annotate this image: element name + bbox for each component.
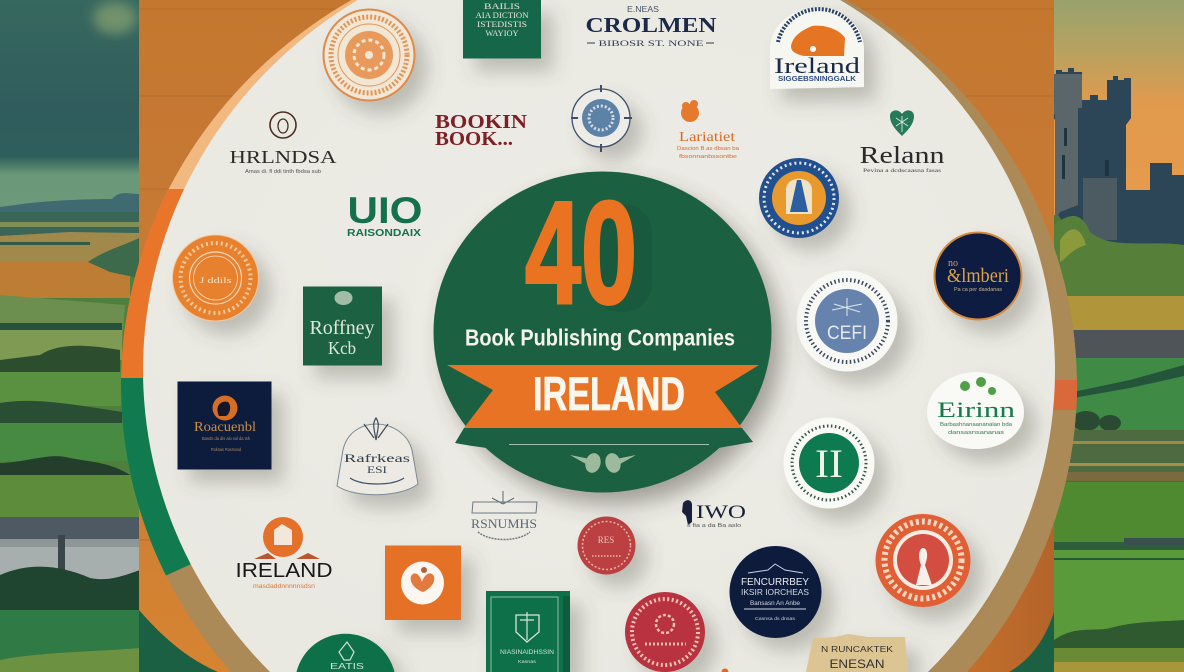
logo: Ireland sticker: SIGGEBSNINGGALK [778, 76, 856, 83]
logo: navy square: Roknas Rosmosd [211, 447, 241, 452]
logo: navy text circle: FENCURRBEY [741, 577, 809, 588]
logo: CEFI white and blue circle: CEFI [827, 323, 867, 344]
left landscape background [0, 0, 140, 672]
logo: green II circle [784, 418, 874, 508]
logo: torn paper label: ENESAN [830, 657, 884, 671]
ribbon fold [455, 428, 753, 449]
logo: navy square: Roacuenbl [194, 420, 256, 435]
subtitle: Book Publishing Companies [465, 324, 735, 350]
divider line [509, 444, 709, 446]
logo: IWO wordmark [682, 500, 746, 529]
logo: Hrlndsa wordmark [230, 112, 336, 175]
logo: line-art badge [337, 418, 418, 495]
logo: green square top [463, 0, 541, 58]
logo: orange red seal [876, 514, 970, 607]
logo: small red seal [578, 516, 636, 574]
logo: Hrlndsa wordmark: HRLNDSA [230, 147, 336, 167]
logo: navy Imberi circle: no [948, 258, 958, 269]
logo: Ireland sticker [770, 8, 864, 89]
logo: large red seal [625, 592, 705, 672]
central green badge [434, 171, 772, 492]
logo: Ireland wordmark with orange circle: masdaddnnnnnsdsn [253, 584, 315, 590]
logo: orange floral seal [324, 10, 414, 100]
logo: engraved stamp: RSNUMHS [471, 516, 537, 531]
logo: engraved stamp [471, 491, 537, 540]
right landscape background [1050, 0, 1184, 672]
logo: IWO wordmark: IWO [696, 502, 746, 523]
logo: Crolmen wordmark: BIBOSR ST. NONE [598, 39, 704, 48]
logo: Lariatiet orange mark: Lariatiet [679, 130, 735, 145]
ribbon title: IRELAND [533, 367, 685, 420]
logo: line-art badge: ESI [367, 465, 387, 475]
orange background panel [139, 0, 1054, 672]
logo: Eirinn white sticker: dansasnsananas [948, 430, 1004, 436]
logo: green book [486, 591, 570, 672]
logo: Relann wordmark with heart: Pevina a dcdscaasna fasas [863, 167, 941, 174]
logo: Lariatiet orange mark [677, 100, 740, 160]
logo: green square top: BAILIS [484, 1, 520, 11]
logo: orange seal left: J ddils [200, 276, 232, 285]
logo: orange square with white circle [385, 546, 461, 620]
icon: leaf emblem [570, 451, 636, 475]
logo: Crolmen wordmark: E.NEAS [627, 5, 659, 14]
logo: green Roffney square [303, 286, 382, 366]
logo: green Roffney square: Kcb [328, 338, 356, 358]
logo: Crolmen wordmark: CROLMEN [586, 13, 716, 37]
logo: Ireland wordmark with orange circle: IRELAND [236, 560, 332, 582]
logo: Relann wordmark with heart [860, 110, 944, 174]
logo: navy Imberi circle [934, 232, 1022, 320]
logo: green square top: WAYIOY [486, 28, 518, 38]
logo: Relann wordmark with heart: Relann [860, 143, 944, 169]
logo: green square top: AIA DICTION [476, 10, 528, 20]
logo: IWO wordmark: Il fia a da Ba aslo [687, 523, 741, 529]
logo: CEFI white and blue circle [796, 270, 898, 372]
logo: navy square [178, 382, 272, 470]
logo: Bookin Book wordmark: BOOK... [435, 128, 513, 150]
logo: green circle bottom: EATIS [330, 662, 364, 671]
logo: Bookin Book wordmark: BOOKIN [435, 111, 528, 133]
logo: line-art badge: Rafrkeas [344, 451, 410, 465]
logo: green circle bottom [296, 634, 394, 672]
logo: green book: NIASINAIDHSSIN [500, 649, 554, 656]
logo: blue and orange badge [759, 158, 839, 238]
logo: navy Imberi circle: &lmberi [947, 265, 1009, 287]
logo: navy text circle: Bansasn An Anbe [750, 600, 800, 607]
logo: blue compass seal [571, 85, 632, 152]
logo: green Roffney square: Roffney [310, 317, 374, 339]
logo: navy square: Bands da dis alo sol da tsh [202, 436, 250, 441]
logo: torn paper label: N RUNCAKTEK [821, 644, 893, 654]
logo: green II circle: II [815, 441, 843, 486]
logo: green book: Kasnas [518, 659, 537, 664]
icon: castle [1050, 68, 1184, 245]
logo: Ireland sticker: Ireland [774, 53, 860, 78]
logo: Eirinn white sticker: Barbashnanaananalan bda [940, 422, 1013, 428]
small orange mark bottom edge [722, 669, 728, 672]
logo: Hrlndsa wordmark: Amas di. fl ddi tinth fbdsa sub [245, 169, 321, 175]
logo: navy Imberi circle: Pa ca per dasdanas [954, 287, 1002, 293]
logo: green square top: ISTEDISTIS [477, 19, 527, 29]
logo: Bookin Book wordmark [435, 111, 528, 150]
logo: Lariatiet orange mark: fbsonnanbssontbe [679, 154, 737, 160]
logo: Ireland wordmark with orange circle [236, 517, 332, 590]
logo: navy text circle [730, 546, 822, 638]
logo: orange seal left [172, 235, 258, 321]
logo: UIO green wordmark: RAISONDAIX [347, 227, 421, 239]
logo: Lariatiet orange mark: Dascion B as dbsan ba [677, 146, 740, 152]
logo: navy text circle: Casnsa ds dnsas [755, 616, 796, 621]
logo: navy text circle: IKSIR IORCHEAS [741, 587, 809, 597]
logo: small red seal: RES [598, 535, 614, 545]
ribbon [447, 365, 759, 428]
cream central circle [143, 0, 1055, 672]
logo: Crolmen wordmark [586, 5, 716, 48]
logo: UIO green wordmark: UIO [348, 190, 422, 231]
logo: Eirinn white sticker [927, 372, 1024, 449]
logo: Eirinn white sticker: Eirinn [937, 397, 1015, 422]
big number 40: 40 [525, 171, 637, 334]
green bottom corners [139, 610, 1054, 672]
logo: torn paper label [806, 634, 908, 672]
